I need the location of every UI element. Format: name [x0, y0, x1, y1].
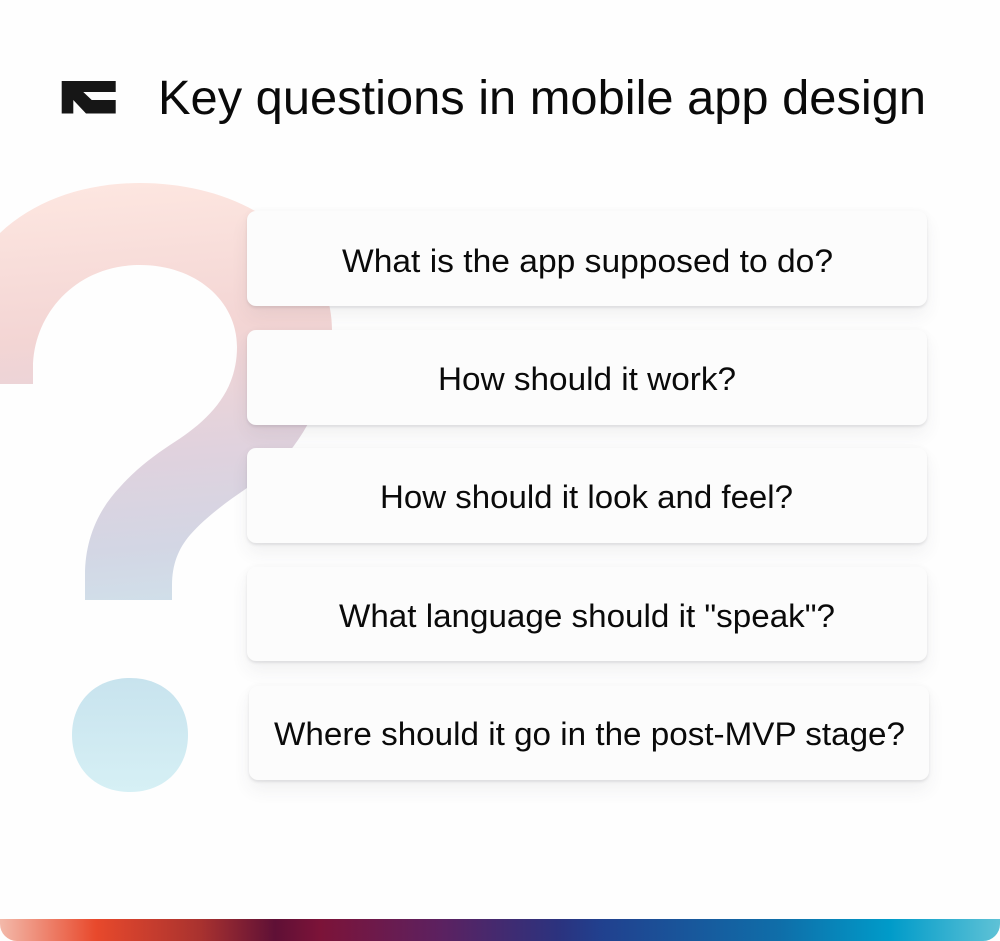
question 5 text: Where should it go in the post-MVP stage? [274, 716, 905, 752]
icon: logo [62, 81, 116, 114]
question mark dot [72, 678, 188, 792]
card: question 4 [247, 567, 927, 661]
gradient footer bar [0, 919, 1000, 941]
card: question 5 [249, 686, 929, 780]
question 1 text: What is the app supposed to do? [342, 243, 833, 279]
question 2 text: How should it work? [438, 361, 736, 397]
card: question 1 [247, 211, 927, 306]
question 4 text: What language should it "speak"? [339, 598, 835, 634]
question 3 text: How should it look and feel? [380, 479, 793, 515]
card: question 3 [247, 448, 927, 543]
title: Key questions in mobile app design [158, 72, 926, 125]
card: question 2 [247, 330, 927, 425]
